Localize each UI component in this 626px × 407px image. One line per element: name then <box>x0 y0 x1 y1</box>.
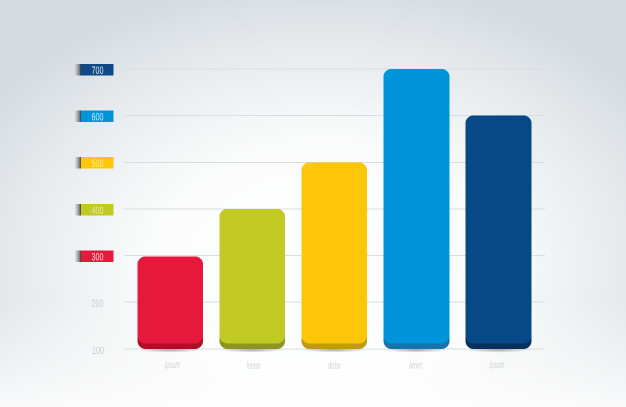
bar: amet 700 <box>384 69 450 349</box>
label: dolor: dolor <box>328 361 341 372</box>
label: 100: 100 <box>92 345 104 357</box>
grid lines <box>124 69 545 349</box>
label: amet: amet <box>409 360 423 372</box>
y axis labels <box>75 64 114 357</box>
label: lorem: lorem <box>246 361 260 372</box>
tag: 300: 300 <box>92 252 104 264</box>
tag: 700: 700 <box>92 65 104 77</box>
tag: 500 <box>75 157 114 170</box>
label: ipsum: ipsum <box>165 360 180 371</box>
bar: ipsum 300 <box>138 256 203 349</box>
bar: lorem 400 <box>220 209 285 349</box>
tag: 300 <box>75 250 114 264</box>
tag: 600 <box>75 110 114 124</box>
tag: 500: 500 <box>92 158 104 170</box>
tag: 400: 400 <box>92 205 104 217</box>
bar: dolor 500 <box>302 162 367 349</box>
tag: 400 <box>75 204 114 217</box>
label: ipsum: ipsum <box>490 360 504 371</box>
bar: ipsum 600 <box>466 116 532 349</box>
x axis labels <box>165 360 504 372</box>
tag: 700 <box>75 64 114 77</box>
label: 200: 200 <box>92 298 104 310</box>
tag: 600: 600 <box>92 112 104 124</box>
bar shadows <box>138 348 530 352</box>
